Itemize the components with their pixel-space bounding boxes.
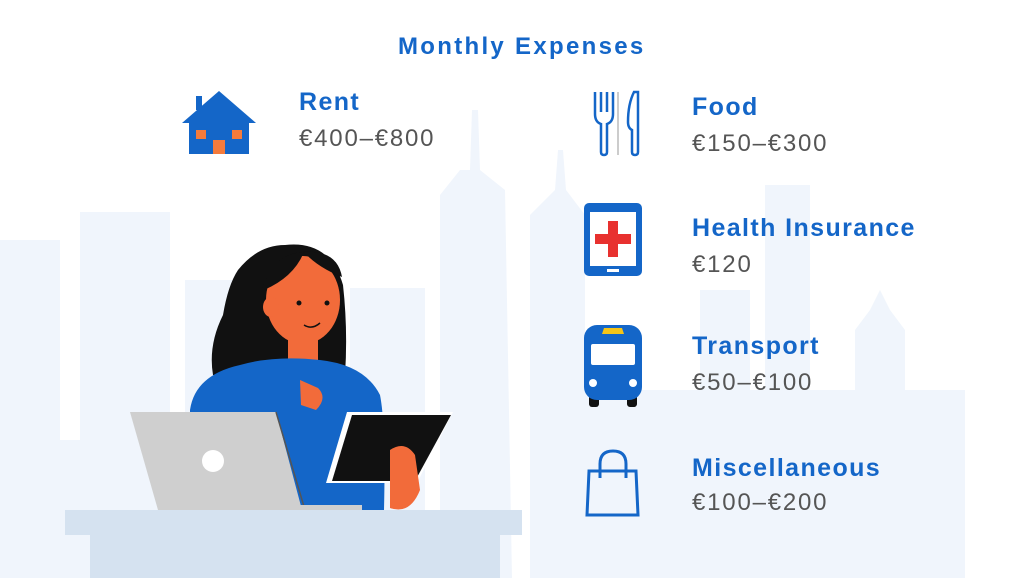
label: transport: Transport <box>692 332 820 360</box>
label: rent: €400–€800 <box>299 125 435 152</box>
label: food <box>692 93 828 157</box>
label: health insurance <box>692 214 916 278</box>
label: miscellaneous: €100–€200 <box>692 489 828 516</box>
label: rent <box>299 88 435 152</box>
label: food: Food <box>692 93 759 121</box>
label: miscellaneous: Miscellaneous <box>692 454 881 482</box>
label: miscellaneous <box>692 454 881 516</box>
label: health insurance: Health Insurance <box>692 214 916 242</box>
label: health insurance: €120 <box>692 251 753 278</box>
label: transport <box>692 332 820 396</box>
label: food: €150–€300 <box>692 130 828 157</box>
title: Monthly Expenses <box>398 33 646 60</box>
label: transport: €50–€100 <box>692 369 813 396</box>
label: rent: Rent <box>299 88 360 116</box>
